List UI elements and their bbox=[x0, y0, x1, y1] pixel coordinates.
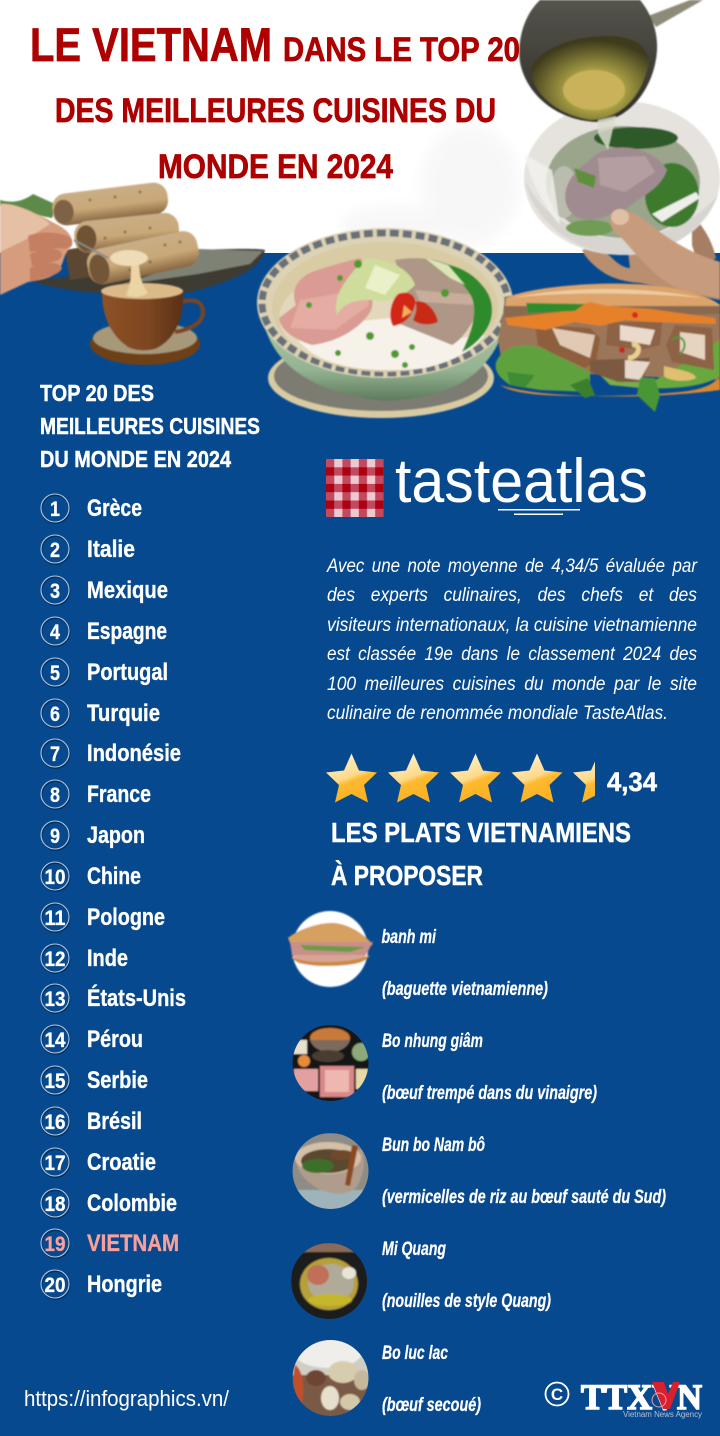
heading: dishes: LES PLATS VIETNAMIENS bbox=[331, 817, 631, 848]
title: DANS LE TOP 20 bbox=[283, 31, 520, 69]
text: bo nhung giam: (bœuf trempé dans du vinaigre) bbox=[382, 1083, 597, 1104]
ranking list: 2 bbox=[50, 539, 60, 562]
photo: spring rolls on plate bbox=[30, 181, 265, 295]
ranking list: 9 bbox=[50, 825, 60, 848]
ranking list: Serbie bbox=[87, 1067, 148, 1094]
ranking list: Brésil bbox=[87, 1108, 142, 1135]
ranking list: Portugal bbox=[87, 659, 168, 686]
heading: dishes: À PROPOSER bbox=[331, 860, 483, 891]
title: LE VIETNAM bbox=[30, 18, 272, 71]
ranking list: Inde bbox=[87, 945, 128, 972]
ranking list: Pérou bbox=[87, 1026, 143, 1053]
ranking list: Mexique bbox=[87, 577, 168, 604]
steam haze bbox=[340, 125, 520, 245]
ranking list: 10 bbox=[44, 866, 66, 889]
intro paragraph bbox=[326, 556, 698, 724]
text: bo nhung giam: Bo nhung giâm bbox=[382, 1031, 483, 1052]
ranking list: VIETNAM bbox=[87, 1230, 179, 1257]
ranking list: Colombie bbox=[87, 1190, 177, 1217]
heading: top 20 list bbox=[40, 380, 260, 472]
ranking list: 8 bbox=[50, 784, 60, 807]
ranking list: Grèce bbox=[87, 495, 142, 522]
text: bun bo nam bo: Bun bo Nam bô bbox=[382, 1135, 485, 1156]
intro paragraph: visiteurs internationaux, la cuisine vietnamienne bbox=[327, 615, 697, 636]
photo: ladle of broth bbox=[519, 0, 703, 150]
dish: bo nhung giam bbox=[292, 1025, 597, 1104]
heading: top 20 list: MEILLEURES CUISINES bbox=[40, 413, 260, 439]
dish: mi quang bbox=[291, 1239, 551, 1320]
ranking list: 16 bbox=[44, 1111, 66, 1134]
photo: leaves behind spring rolls bbox=[0, 194, 58, 218]
ranking list: 20 bbox=[44, 1274, 66, 1297]
intro paragraph: culinaire de renommée mondiale TasteAtlas. bbox=[327, 703, 668, 724]
ranking list: 15 bbox=[44, 1070, 66, 1093]
thumbnail: shaking beef bbox=[292, 1336, 370, 1418]
intro paragraph: des experts culinaires, des chefs et des bbox=[327, 585, 697, 606]
text: banh mi: (baguette vietnamienne) bbox=[382, 979, 548, 1000]
ranking list: Indonésie bbox=[87, 740, 181, 767]
title bbox=[30, 18, 520, 186]
ranking list: 11 bbox=[44, 907, 66, 930]
rating stars bbox=[326, 754, 624, 802]
ranking list: 7 bbox=[50, 743, 60, 766]
text: bo luc lac: (bœuf secoué) bbox=[382, 1395, 481, 1416]
ranking list bbox=[41, 494, 186, 1299]
ranking list: 5 bbox=[50, 662, 60, 685]
rating value: 4,34 bbox=[607, 767, 657, 797]
heading: top 20 list: TOP 20 DES bbox=[40, 380, 154, 406]
ranking list: 3 bbox=[50, 580, 60, 603]
photo: hand holding bowl of pho bbox=[524, 101, 720, 300]
ranking list: Chine bbox=[87, 863, 141, 890]
title: MONDE EN 2024 bbox=[158, 148, 393, 186]
copyright mark bbox=[546, 1382, 568, 1406]
text: mi quang bbox=[382, 1239, 551, 1312]
ranking list: 4 bbox=[50, 621, 60, 644]
ranking list: Espagne bbox=[87, 618, 167, 645]
text: mi quang: (nouilles de style Quang) bbox=[382, 1291, 551, 1312]
photo: banh mi sandwich bbox=[496, 284, 720, 412]
ranking list: 18 bbox=[44, 1193, 66, 1216]
title: DES MEILLEURES CUISINES DU bbox=[55, 92, 496, 130]
copyright mark: C bbox=[551, 1385, 563, 1404]
text: bun bo nam bo bbox=[382, 1135, 666, 1208]
dish: bo luc lac bbox=[292, 1336, 481, 1418]
text: mi quang: Mi Quang bbox=[382, 1239, 446, 1260]
thumbnail: banh mi bbox=[288, 911, 373, 987]
ranking list: Italie bbox=[87, 536, 135, 563]
logo: TTXVN: TTXVN bbox=[581, 1377, 702, 1417]
thumbnail: beef hotpot bbox=[292, 1025, 370, 1103]
ranking list: 17 bbox=[44, 1152, 66, 1175]
ranking list: France bbox=[87, 781, 151, 808]
logo: TasteAtlas: tasteatlas bbox=[395, 447, 648, 516]
ranking list: 14 bbox=[44, 1029, 66, 1052]
ranking list: 6 bbox=[50, 703, 60, 726]
ranking list: Japon bbox=[87, 822, 145, 849]
heading: top 20 list: DU MONDE EN 2024 bbox=[40, 446, 231, 472]
source url: https://infographics.vn/ bbox=[24, 1386, 230, 1411]
photo: coffee cup with condensed milk bbox=[90, 250, 203, 365]
photo: hand with spoon bbox=[0, 204, 108, 295]
heading: dishes bbox=[331, 817, 631, 891]
ranking list: 19 bbox=[44, 1233, 66, 1256]
photo: large bowl of pho bbox=[257, 228, 513, 418]
text: bo luc lac: Bo luc lac bbox=[382, 1343, 448, 1364]
text: bo nhung giam bbox=[382, 1031, 597, 1104]
logo: TTXVN: Vietnam News Agency bbox=[623, 1410, 702, 1419]
text: banh mi: banh mi bbox=[382, 927, 437, 948]
ranking list: Turquie bbox=[87, 700, 160, 727]
ranking list: Hongrie bbox=[87, 1271, 162, 1298]
text: banh mi bbox=[382, 927, 548, 1000]
dish: bun bo nam bo bbox=[292, 1133, 666, 1212]
thumbnail: mi quang bowl bbox=[291, 1243, 368, 1320]
ranking list: 1 bbox=[50, 498, 60, 521]
thumbnail: noodle bowl bbox=[292, 1133, 370, 1212]
ranking list: Pologne bbox=[87, 904, 165, 931]
ranking list: 12 bbox=[44, 948, 66, 971]
dish: banh mi bbox=[288, 911, 548, 1000]
intro paragraph: 100 meilleures cuisines du monde par le site bbox=[327, 674, 697, 695]
ranking list: Croatie bbox=[87, 1149, 156, 1176]
ranking list: États-Unis bbox=[87, 984, 186, 1012]
ranking list: 13 bbox=[44, 988, 66, 1011]
text: bo luc lac bbox=[382, 1343, 481, 1416]
